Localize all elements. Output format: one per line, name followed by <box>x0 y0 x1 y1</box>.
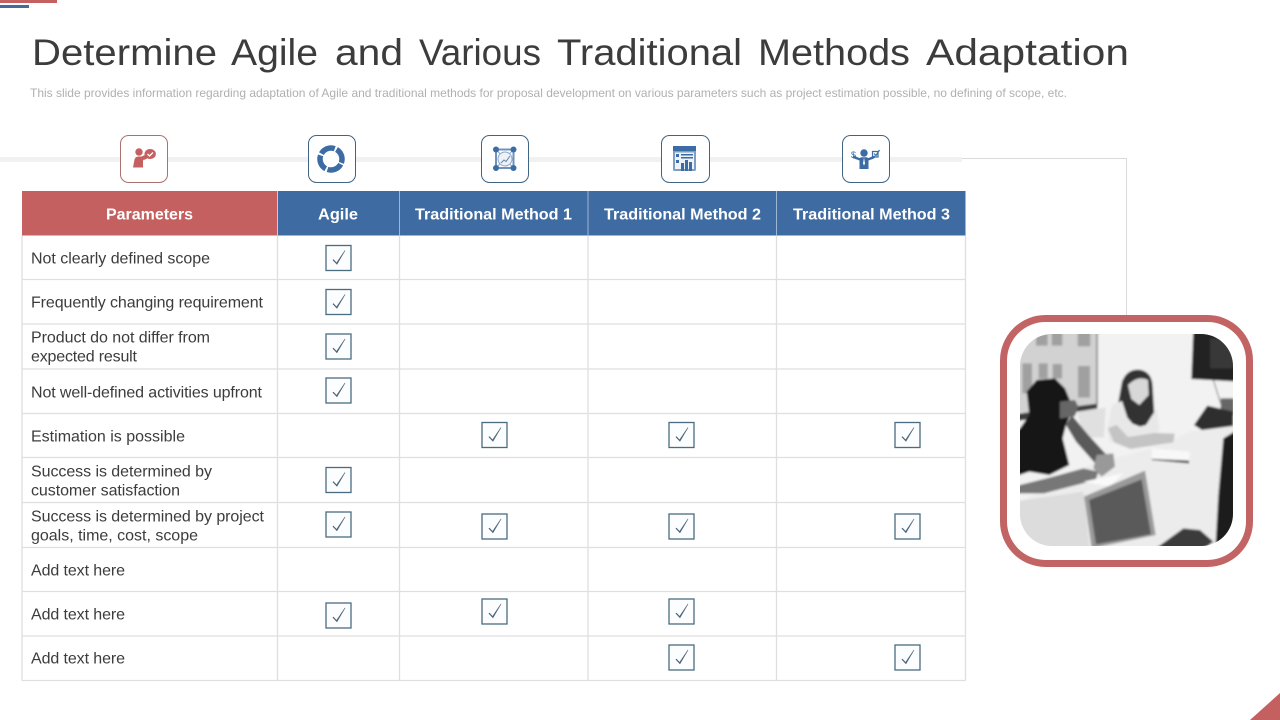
parameter labels: Product do not differ from <box>31 330 210 346</box>
icon: businessperson balancing <box>842 136 890 182</box>
table header <box>22 191 966 236</box>
icon: network chart <box>482 136 528 182</box>
icon: browser bar chart <box>662 136 710 182</box>
parameter labels: Success is determined by project <box>31 508 265 526</box>
icon: agile cycle arrows <box>308 136 356 182</box>
title: Traditional <box>557 31 742 73</box>
laptop <box>1084 471 1156 548</box>
top accent bars <box>0 0 57 8</box>
table grid <box>22 236 966 680</box>
hair of right woman <box>1116 370 1155 431</box>
table header: Traditional Method 1 <box>415 206 572 224</box>
title <box>32 31 1129 73</box>
title: Determine <box>32 31 217 73</box>
photo frame <box>1004 318 1250 564</box>
parameter labels: Add text here <box>31 562 125 580</box>
parameter labels: Frequently changing requirement <box>31 294 264 312</box>
icon: parameters person with speech bubble <box>120 136 168 182</box>
parameter labels: Estimation is possible <box>31 428 185 446</box>
title: Various <box>419 31 541 73</box>
parameter labels: Success is determined by <box>31 464 212 480</box>
table <box>22 191 966 680</box>
table header: Traditional Method 2 <box>604 206 761 224</box>
bottom-right corner triangle <box>1250 693 1280 720</box>
parameter labels: customer satisfaction <box>31 482 180 500</box>
table header: Traditional Method 3 <box>793 206 950 224</box>
icon: businessperson balancing: $ <box>851 150 856 160</box>
table header: Agile <box>318 206 358 224</box>
checkmarks <box>326 246 920 670</box>
subtitle: This slide provides information regarding adaptation of Agile and traditional methods for proposal development on various parameters such as project estimation possible, no defining of scope, etc. <box>30 86 1067 100</box>
parameter labels: goals, time, cost, scope <box>31 528 198 544</box>
title: Adaptation <box>926 31 1129 73</box>
parameter labels: Add text here <box>31 650 125 668</box>
parameter labels: Add text here <box>31 606 125 624</box>
title: and <box>335 31 403 73</box>
table header: Parameters <box>106 206 193 224</box>
parameter labels: expected result <box>31 348 138 366</box>
photo: two women at a meeting table <box>1020 334 1233 546</box>
left woman <box>1020 377 1071 476</box>
title: Agile <box>231 31 318 73</box>
parameter labels: Not well-defined activities upfront <box>31 384 263 402</box>
parameter labels: Not clearly defined scope <box>31 250 210 268</box>
title: Methods <box>758 31 910 73</box>
connector band and outline <box>0 157 1126 315</box>
parameter labels <box>31 250 265 668</box>
